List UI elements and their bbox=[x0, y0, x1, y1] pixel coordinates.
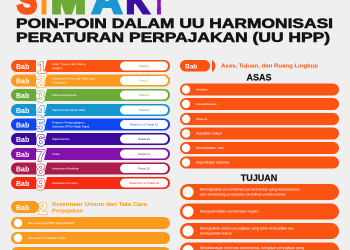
row: Bab 3: Pajak Penghasilan bbox=[52, 93, 77, 97]
row: Bab 6: Pasal 13 bbox=[138, 137, 150, 141]
heading: UU HPP bbox=[16, 16, 333, 45]
item: Keadilan bbox=[180, 84, 339, 96]
heading: ASAS: ASAS bbox=[246, 72, 272, 82]
row: Bab 7: Cukai bbox=[52, 152, 60, 156]
row: Bab 2 bbox=[11, 72, 170, 92]
item: objective 4 bbox=[180, 242, 339, 250]
row: Bab 1: Lingkup bbox=[52, 66, 63, 70]
item: objective 3 bbox=[180, 223, 339, 239]
row: Bab 5: 5 bbox=[36, 116, 45, 136]
row: Bab 7 bbox=[11, 146, 170, 165]
row: Bab 2: Perpajakan bbox=[52, 80, 68, 84]
heading: Bab 2 title: Perpajakan bbox=[52, 208, 83, 214]
item: objective 1: Meningkatkan pertumbuhan perekonomian yang berkelanjutan bbox=[200, 188, 300, 192]
item: Kepentingan nasional: Kepentingan nasional bbox=[196, 160, 229, 164]
heading: Bab 2 title bbox=[52, 202, 148, 214]
row: Bab 7: 7 bbox=[36, 146, 45, 165]
row: Bab 8 bbox=[11, 160, 170, 180]
item: Keadilan: Keadilan bbox=[196, 88, 208, 92]
row: Bab 5 bbox=[11, 116, 170, 136]
item: Kepastian hukum bbox=[180, 128, 339, 140]
row: Bab 1 bbox=[11, 58, 170, 77]
item: Kesederhanaan bbox=[180, 98, 339, 110]
item: Efisiensi bbox=[180, 113, 339, 125]
item: Efisiensi: Efisiensi bbox=[196, 117, 208, 121]
item: Bab 2 second bbox=[11, 232, 170, 244]
row: Bab 9: Ketentuan Penutup bbox=[52, 181, 78, 185]
item: Kepastian hukum: Kepastian hukum bbox=[196, 132, 222, 136]
row: Bab 1: Asas, Tujuan, dan Ruang bbox=[52, 62, 86, 66]
row: Bab 1: Pasal 1 bbox=[139, 64, 149, 68]
row: Bab 5: Bab bbox=[16, 122, 29, 130]
badge: Bab 2: 2 bbox=[38, 199, 47, 218]
row: Bab 8: Pasal 15 bbox=[138, 167, 150, 171]
badge: Bab 2: Bab bbox=[16, 205, 29, 212]
row: Bab 9 bbox=[11, 175, 170, 194]
item: objective 2 bbox=[180, 204, 339, 220]
title: SIMAK bbox=[17, 0, 162, 21]
item: objective 3: berkepastian hukum bbox=[200, 232, 232, 236]
panel: Bab 1 detail bbox=[180, 60, 339, 250]
row: Bab 3 bbox=[11, 87, 170, 106]
heading: UU HPP: POIN-POIN DALAM UU HARMONISASI bbox=[16, 16, 333, 31]
row: Bab 4: Bab bbox=[16, 108, 29, 115]
row: Bab 6 bbox=[11, 131, 170, 150]
badge: Bab 1: Bab bbox=[185, 64, 197, 70]
row: Bab 7: Bab bbox=[16, 152, 29, 159]
item: Kemanfaatan: Kemanfaatan, dan bbox=[196, 146, 224, 150]
heading: TUJUAN: TUJUAN bbox=[241, 173, 277, 183]
row: Bab 1: 1 bbox=[37, 58, 46, 77]
item: Bab 2 second: Konsultan Pengadilan Pajak bbox=[28, 236, 66, 240]
item: Bab 2 first: NIK sebagai NPWP Orang Pribadi bbox=[28, 221, 74, 225]
row: Bab 4: Pajak Pertambahan Nilai bbox=[52, 108, 85, 112]
item: objective 1: dan mendukung percepatan pemulihan perekonomian bbox=[200, 192, 286, 196]
row: Bab 7: Pasal 14 bbox=[138, 152, 150, 156]
row: Bab 6: Bab bbox=[16, 137, 29, 144]
row: Bab 3: 3 bbox=[36, 87, 45, 106]
row: Bab 3: Pasal 3 bbox=[139, 93, 149, 97]
item: Bab 2 first bbox=[11, 217, 170, 229]
row: Bab 2: 2 bbox=[36, 72, 45, 92]
row: Bab 9: Pasal 16 s.d. Pasal 19 bbox=[129, 181, 159, 185]
heading: Bab 1 title: Asas, Tujuan, dan Ruang Lingkup bbox=[221, 64, 318, 70]
item: objective 2: Mengoptimalkan penerimaan negara bbox=[200, 210, 259, 214]
row: Bab 4: 4 bbox=[36, 102, 46, 121]
panel: chapter list bbox=[11, 58, 170, 194]
heading: Bab 2 title: Ketentuan Umum dan Tata Cara bbox=[52, 202, 148, 208]
item: Bab 2 third bbox=[11, 247, 170, 250]
badge: Bab 2 bbox=[11, 199, 47, 218]
row: Bab 5: Pasal 5 s.d. Pasal 12 bbox=[130, 123, 158, 127]
row: Bab 9: 9 bbox=[36, 175, 45, 194]
item: objective 4: Melaksanakan reformasi administrasi, kebijakan perpajakan yang bbox=[200, 246, 304, 250]
row: Bab 2: Pasal 2 bbox=[139, 79, 149, 83]
row: Bab 5: Program Pengungkapan bbox=[52, 120, 85, 124]
item: Kesederhanaan: Kesederhanaan bbox=[196, 102, 218, 106]
row: Bab 9: Bab bbox=[16, 181, 29, 188]
heading: UU HPP: PERATURAN PERPAJAKAN (UU HPP) bbox=[16, 30, 330, 45]
row: Bab 1: Bab bbox=[16, 64, 29, 71]
item: Kemanfaatan bbox=[180, 142, 339, 154]
badge: Bab 1 bbox=[180, 60, 215, 72]
row: Bab 4: Pasal 4 bbox=[139, 108, 149, 112]
row: Bab 6: 6 bbox=[36, 131, 45, 150]
row: Bab 8: 8 bbox=[36, 160, 45, 180]
row: Bab 3: Bab bbox=[16, 93, 29, 100]
row: Bab 4 bbox=[11, 102, 170, 121]
item: objective 3: Mewujudkan sistem perpajakan yang lebih berkeadilan dan bbox=[200, 226, 294, 230]
row: Bab 5: Sukarela (PPS) Wajib Pajak bbox=[52, 124, 90, 128]
row: Bab 2: Ketentuan Umum dan Tata Cara bbox=[52, 76, 95, 80]
row: Bab 8: Ketentuan Peralihan bbox=[52, 167, 80, 171]
panel: Bab 2 detail bbox=[11, 199, 170, 250]
row: Bab 8: Bab bbox=[16, 166, 29, 174]
row: Bab 2: Bab bbox=[16, 78, 29, 86]
item: Kepentingan nasional bbox=[180, 156, 339, 168]
item: objective 1 bbox=[180, 184, 339, 200]
row: Bab 6: Pajak Karbon bbox=[52, 137, 70, 141]
